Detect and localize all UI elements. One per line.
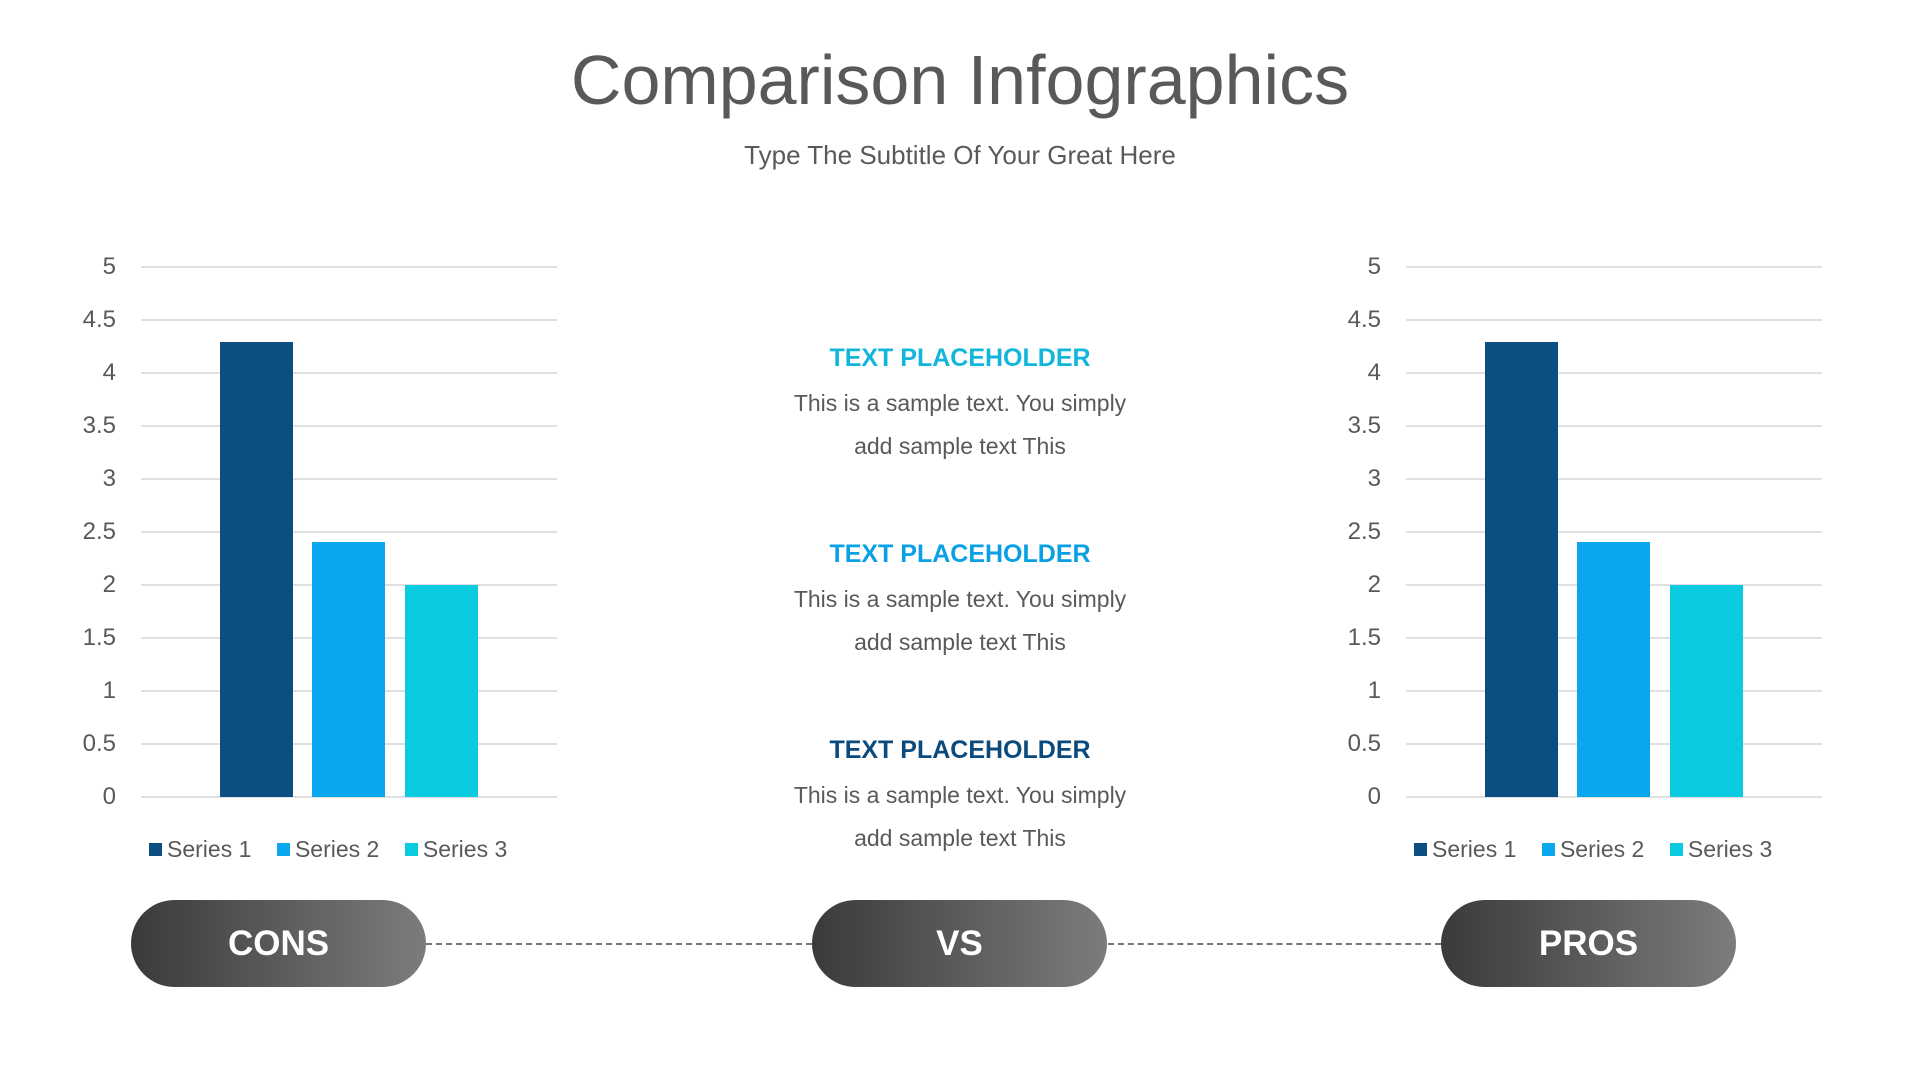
legend: Series 1 Series 2 Series 3 (1432, 836, 1772, 862)
chart: cons: 2.5 (83, 518, 116, 545)
chart: pros: 1.5 (1348, 624, 1381, 651)
chart: pros: 4.5 (1348, 306, 1381, 333)
chart: pros: 0 (1368, 783, 1381, 810)
chart: cons: 1.5 (83, 624, 116, 651)
bar: series 2 (1577, 542, 1650, 797)
chart: cons: 5 (103, 253, 116, 280)
chart: pros: 2.5 (1348, 518, 1381, 545)
chart: pros: 4 (1368, 359, 1381, 386)
chart: cons: 0 (103, 783, 116, 810)
text block 1: This is a sample text. You simply (794, 390, 1126, 416)
text block 2: add sample text This (854, 629, 1066, 655)
pill: vs (812, 900, 1107, 987)
bar: series 3 (1670, 585, 1743, 797)
chart: pros: 5 (1368, 253, 1381, 280)
text block 3 (794, 736, 1126, 851)
pill: cons (131, 900, 426, 987)
bar: series 3 (405, 585, 478, 797)
bar: series 1 (1485, 342, 1558, 797)
text block 1: add sample text This (854, 433, 1066, 459)
text block 1: TEXT PLACEHOLDER (829, 344, 1091, 372)
bar: series 2 (312, 542, 385, 797)
chart: cons: 4 (103, 359, 116, 386)
chart: cons: 1 (103, 677, 116, 704)
chart: pros: 3.5 (1348, 412, 1381, 439)
pill: pros (1441, 900, 1736, 987)
chart: pros: 0.5 (1348, 730, 1381, 757)
chart: cons: 4.5 (83, 306, 116, 333)
chart: cons: 2 (103, 571, 116, 598)
chart: cons: 3 (103, 465, 116, 492)
chart: pros: 2 (1368, 571, 1381, 598)
chart: cons: 3.5 (83, 412, 116, 439)
text block 2: This is a sample text. You simply (794, 586, 1126, 612)
text block 2 (794, 540, 1126, 655)
text block 3: This is a sample text. You simply (794, 782, 1126, 808)
pill: vs: VS (936, 924, 983, 963)
text block 1 (794, 344, 1126, 459)
pill: cons: CONS (228, 924, 329, 963)
text block 2: TEXT PLACEHOLDER (829, 540, 1091, 568)
subtitle: Type The Subtitle Of Your Great Here (744, 140, 1176, 170)
legend: Series 1 Series 2 Series 3 (167, 836, 507, 862)
bar: series 1 (220, 342, 293, 797)
text block 3: TEXT PLACEHOLDER (829, 736, 1091, 764)
text block 3: add sample text This (854, 825, 1066, 851)
chart: pros: 3 (1368, 465, 1381, 492)
chart: pros (1348, 253, 1822, 862)
chart: cons (83, 253, 557, 862)
title: Comparison Infographics (571, 41, 1349, 119)
pill: pros: PROS (1539, 924, 1638, 963)
chart: pros: 1 (1368, 677, 1381, 704)
chart: cons: 0.5 (83, 730, 116, 757)
